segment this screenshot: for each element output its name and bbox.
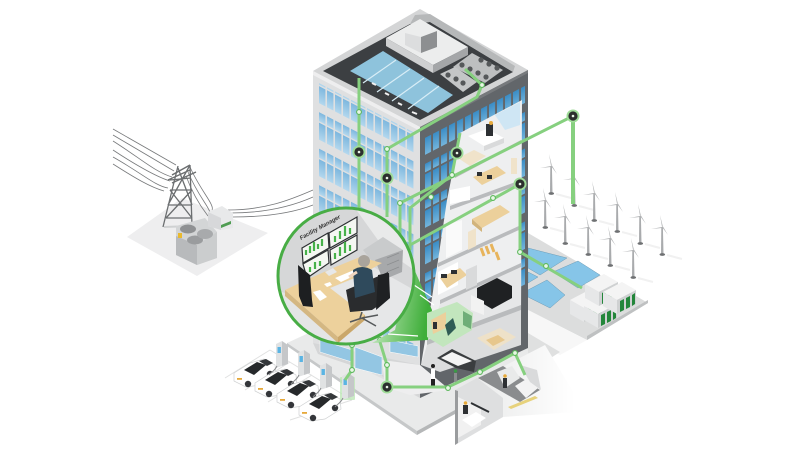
- battery storage cabinets: [570, 274, 636, 328]
- open plan desks: [450, 158, 517, 204]
- solar farm panels: [528, 248, 600, 308]
- panel: wind farm turbines: [534, 154, 682, 282]
- network junction nodes: [350, 83, 580, 393]
- electric vehicles: [234, 359, 341, 421]
- basement office: [458, 397, 489, 438]
- incoming power lines: [113, 129, 313, 217]
- training room: [438, 244, 499, 295]
- right facade windows: [425, 84, 525, 336]
- panel: building right facade: [420, 70, 528, 398]
- panel: right-hand renewable plate: [528, 233, 648, 363]
- pylon tower: [163, 165, 196, 227]
- panel: electric vehicle parking: [225, 341, 355, 421]
- panel: roof: [313, 9, 528, 131]
- control room highlight: [427, 302, 473, 347]
- second person: [454, 369, 457, 382]
- entrance glazing: [320, 340, 418, 375]
- meeting room: [446, 205, 510, 258]
- panel: basement: [455, 345, 575, 445]
- grid switchgear box: [208, 206, 233, 230]
- isometric smart building illustration: [112, 9, 682, 445]
- left facade windows: [319, 83, 415, 353]
- panel: ground plate: [287, 331, 560, 435]
- server racks: [471, 278, 512, 315]
- panel: electrical substation and pylon: [113, 129, 313, 276]
- panel: cutaway interior floors: [421, 100, 522, 372]
- energy network lines: [345, 69, 582, 394]
- facility manager seated in chair: [346, 255, 390, 326]
- keyboard and papers: [313, 268, 354, 301]
- wall monitors with dashboards: [302, 217, 357, 278]
- rooftop cooling fans: [440, 53, 503, 92]
- person standing in lobby: [431, 364, 435, 386]
- callout cone to control room: [372, 262, 473, 347]
- callout: facility manager control room: [278, 205, 414, 345]
- lobby lounge: [437, 328, 516, 372]
- side monitor: [298, 265, 313, 307]
- panel: building left facade: [313, 71, 420, 398]
- executive office: [458, 121, 504, 166]
- filing cabinet: [363, 237, 403, 280]
- floor slabs: [427, 140, 521, 345]
- panel: ground floor entrance: [313, 340, 457, 398]
- charging stations: [269, 341, 355, 407]
- rooftop plant block: [386, 19, 468, 73]
- rooftop solar array: [350, 51, 453, 114]
- callout ring: [278, 208, 414, 344]
- heading: Facility Manager: Facility Manager: [299, 214, 342, 242]
- machine room equipment: [478, 365, 541, 409]
- L-shaped desk: [285, 257, 382, 343]
- transformers: [176, 218, 217, 265]
